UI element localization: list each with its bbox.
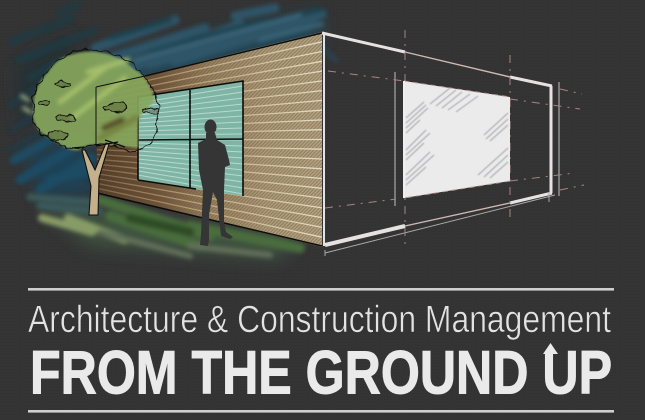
- canopy streaks: [22, 60, 136, 138]
- icon: up arrow in the U: [543, 343, 558, 382]
- hatch streaks: [406, 88, 508, 185]
- window frame: [138, 81, 243, 196]
- tree: [22, 50, 158, 215]
- white hatched window: [404, 81, 510, 198]
- wall outline: [97, 33, 322, 246]
- soft wash underlay: [15, 15, 322, 258]
- paint wash: lower left blue: [14, 140, 95, 190]
- tree trunk: [82, 143, 109, 215]
- window: [138, 81, 243, 196]
- top rule: [28, 288, 614, 291]
- illustration: coloured building sketch: [10, 5, 336, 258]
- bottom rule: [28, 410, 614, 413]
- illustration: wireframe sketch: [322, 30, 584, 256]
- wall siding stripes: [97, 42, 322, 237]
- wall edge through the tree: [96, 76, 145, 146]
- person silhouette: [198, 120, 233, 246]
- canopy outline: [33, 50, 158, 152]
- canopy leaf clusters: [39, 82, 158, 140]
- tree canopy fill: [33, 52, 155, 150]
- paint wash: ground: [30, 197, 300, 256]
- wireframe outline: [322, 33, 559, 256]
- building wall: [96, 32, 322, 247]
- paint wash: sky: [10, 5, 336, 150]
- dashed construction lines: [325, 30, 584, 250]
